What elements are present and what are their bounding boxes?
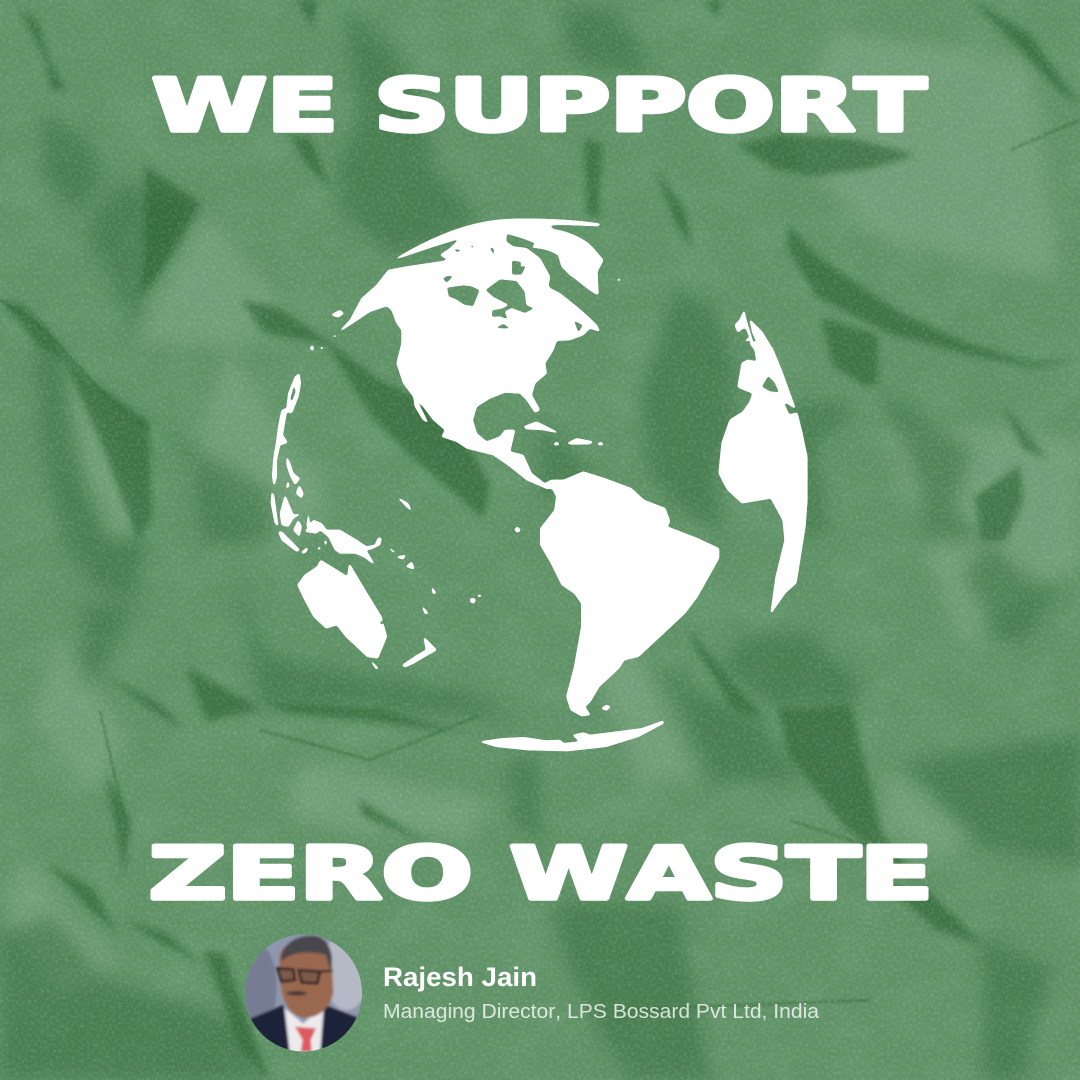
heading: ZERO WASTE: ZERO WASTE (149, 832, 933, 916)
Australia and Pacific islands (297, 497, 521, 669)
attribution role: Managing Director, LPS Bossard Pvt Ltd, India (383, 1001, 820, 1023)
South America (540, 472, 719, 716)
North America and Greenland (338, 219, 603, 489)
Antarctica (480, 721, 664, 751)
Baja and Caribbean islands (310, 278, 620, 445)
Europe and Africa (719, 320, 807, 613)
Scandinavia and British Isles (735, 311, 753, 343)
attribution name: Rajesh Jain (383, 962, 537, 992)
portrait: Rajesh Jain (245, 934, 362, 1052)
heading: WE SUPPORT: WE SUPPORT (152, 64, 926, 148)
Asia coastline (272, 363, 303, 487)
globe illustration (271, 219, 807, 751)
Southeast Asia islands (271, 456, 382, 565)
